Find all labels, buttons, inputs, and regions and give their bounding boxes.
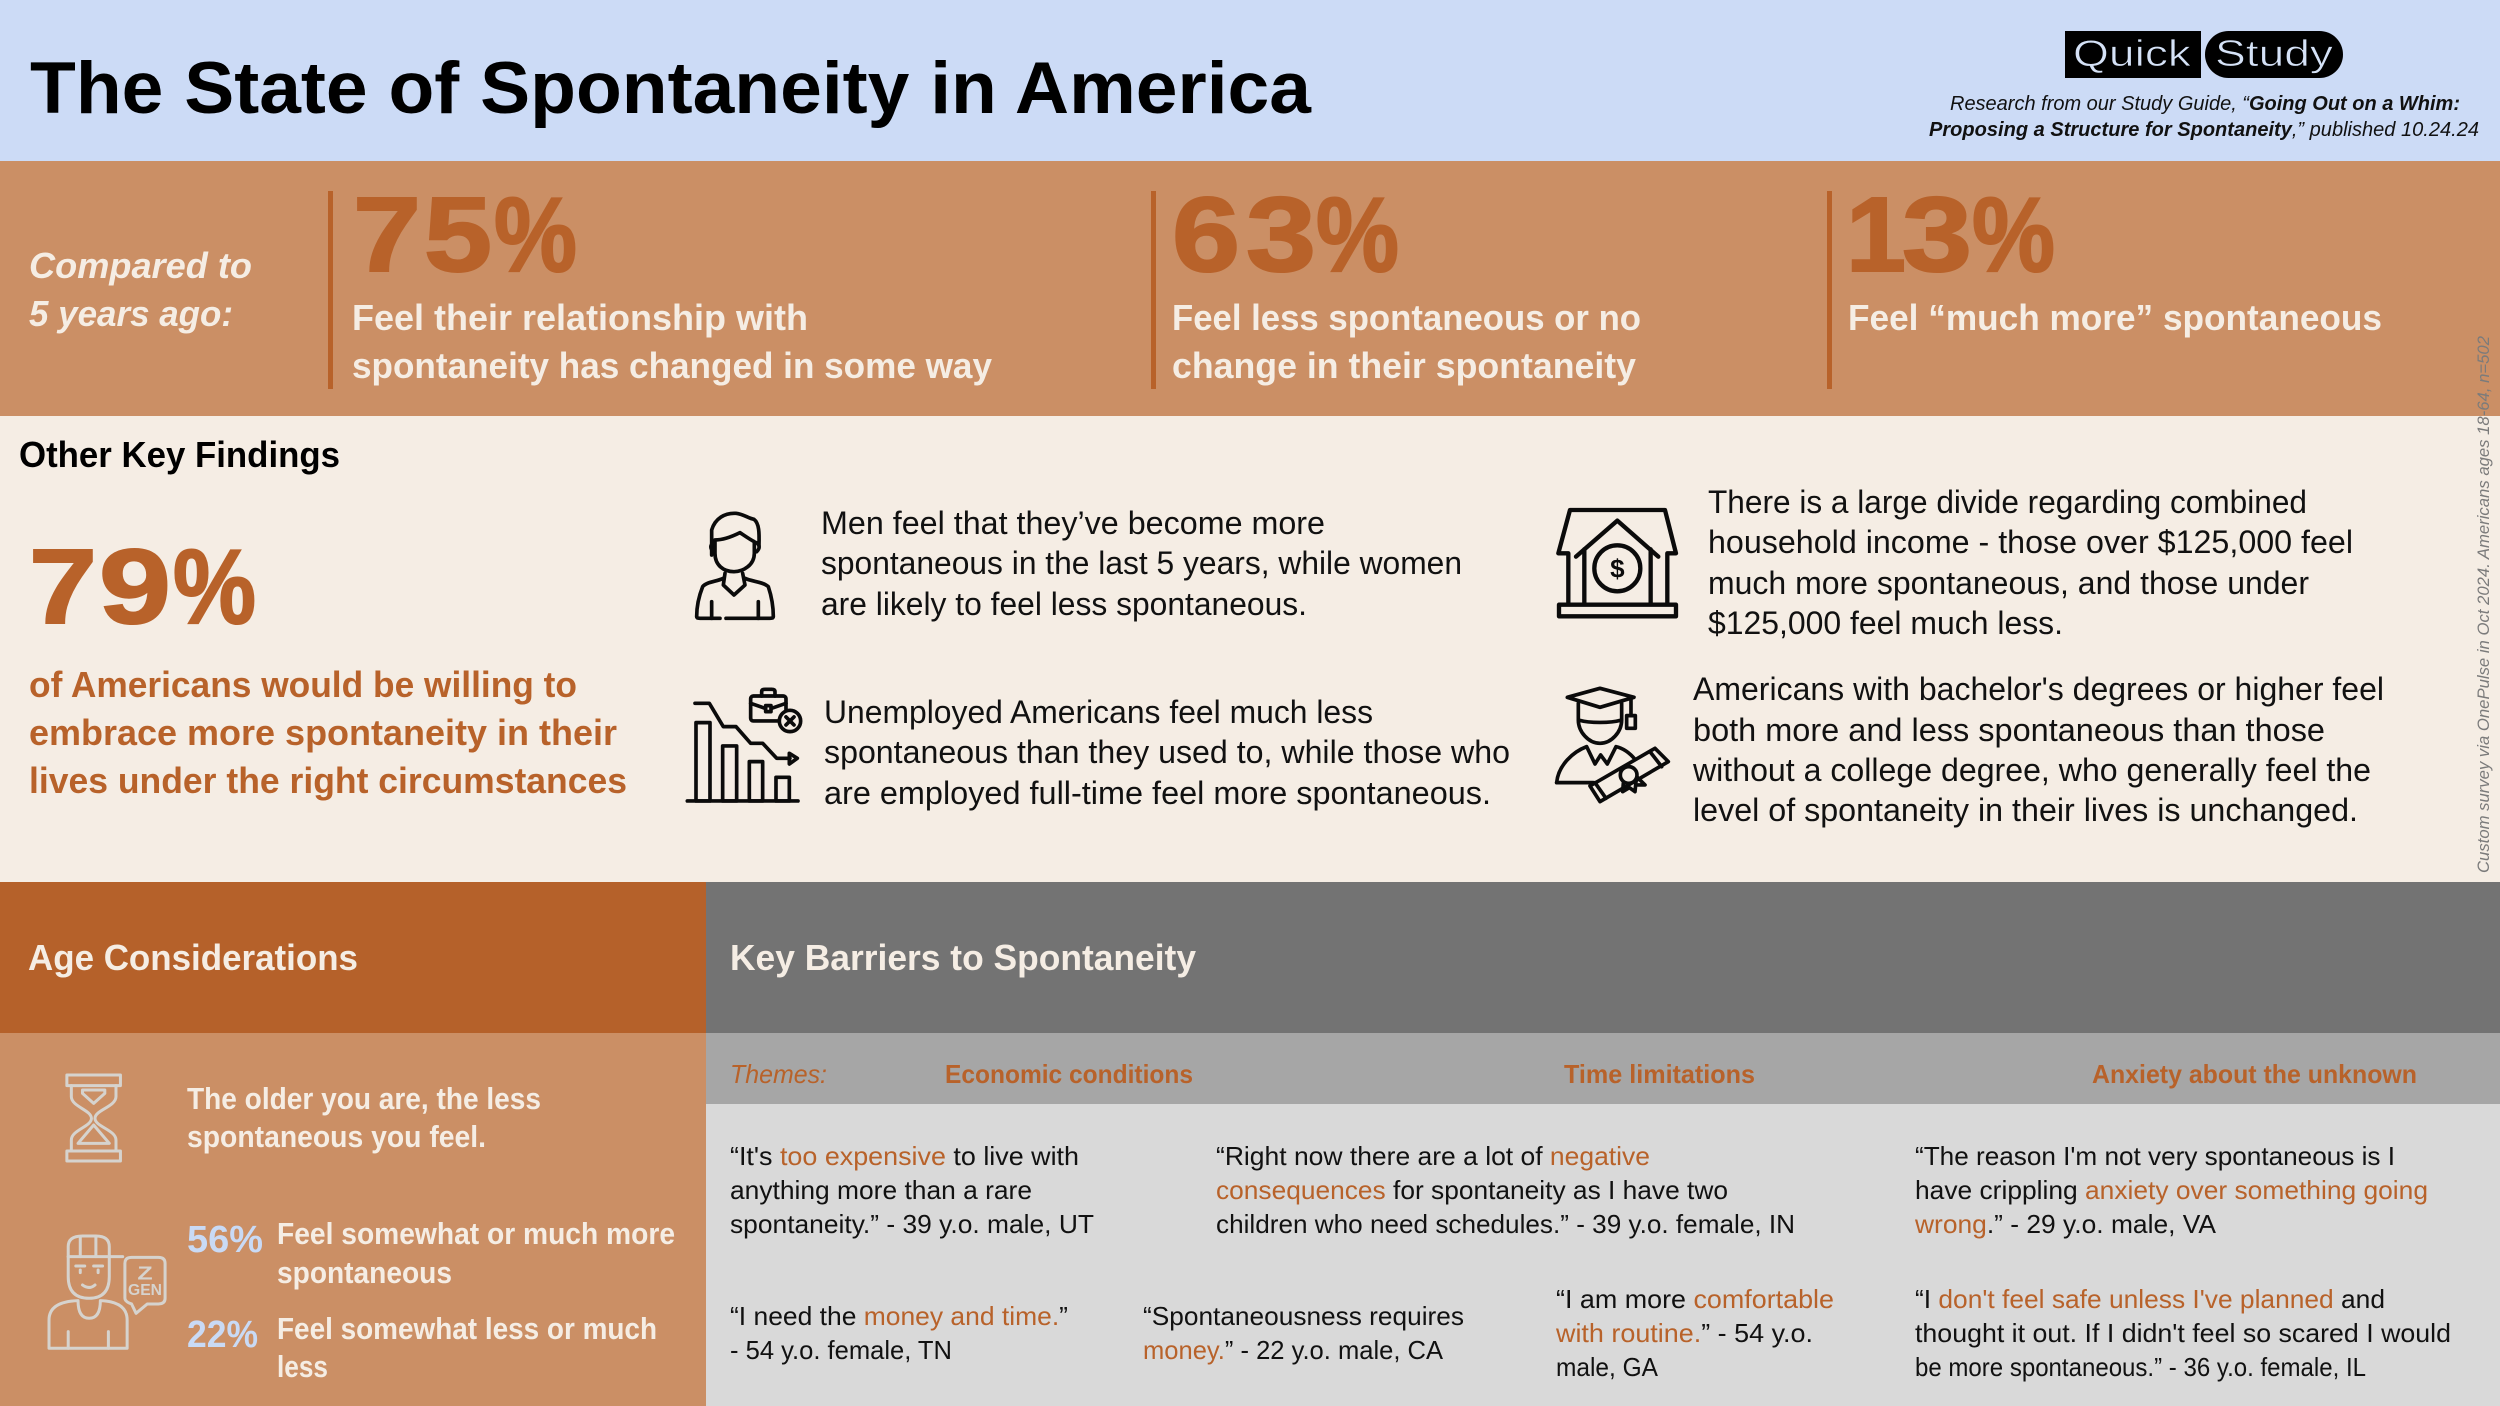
stat: 63%: change in their spontaneity — [1172, 345, 1636, 386]
text: older you are: The older you are, the less — [187, 1081, 541, 1116]
source note: Proposing a Structure for Spontaneity,” published 10.24.24 — [1929, 119, 2479, 141]
stat: 13%: % — [1972, 176, 2055, 294]
stat: 56% more spontaneous — [187, 1216, 675, 1290]
label: compared to — [29, 245, 252, 334]
stat: 75% — [352, 176, 992, 386]
text: older you are — [187, 1081, 541, 1154]
label: compared to: 5 years ago: — [29, 293, 233, 334]
stat: 63%: Feel less spontaneous or no — [1172, 297, 1641, 338]
quote: comfortable with routine: with routine.” - 54 y.o. — [1555, 1318, 1813, 1348]
themes row: Anxiety about the unknown — [2092, 1059, 2417, 1089]
stat: 63%: 6 — [1172, 176, 1240, 294]
stat: 79%: 7 — [29, 528, 97, 646]
stat: 22% less spontaneous — [187, 1311, 657, 1384]
label: compared to: Compared to — [29, 245, 252, 286]
quote: don't feel safe: thought it out. If I didn't feel so scared I would — [1915, 1318, 2451, 1348]
finding: employment — [824, 694, 1510, 811]
finding: household income — [1708, 484, 2353, 641]
panel: compared to 5 years ago — [0, 161, 2500, 416]
quote: don't feel safe — [1915, 1284, 2451, 1382]
finding: education: level of spontaneity in their lives is unchanged. — [1693, 792, 2358, 828]
stat: 79%: lives under the right circumstances — [29, 760, 627, 801]
quote: money and time: - 54 y.o. female, TN — [730, 1335, 952, 1365]
quote: anxiety: “The reason I'm not very spontaneous is I — [1915, 1141, 2395, 1171]
stat: 75%: spontaneity has changed in some way — [352, 345, 992, 386]
quote: money and time: “I need the money and time.” — [730, 1301, 1068, 1331]
quote: too expensive: anything more than a rare — [730, 1175, 1032, 1205]
panel: age considerations — [0, 882, 706, 1406]
themes row — [730, 1059, 2417, 1089]
finding: men and women: spontaneous in the last 5 years, while women — [821, 545, 1462, 581]
stat: 56% more spontaneous: Feel somewhat or much more — [277, 1216, 675, 1251]
quote: anxiety — [1914, 1141, 2428, 1239]
quote: don't feel safe: be more spontaneous.” - 36 y.o. female, IL — [1915, 1352, 2366, 1382]
logo: Quick Study: Study — [2215, 33, 2334, 74]
heading: other key findings: Other Key Findings — [19, 434, 340, 475]
stat: 22% less spontaneous: 22% — [187, 1314, 258, 1356]
themes row: Time limitations — [1564, 1059, 1755, 1089]
finding: education: both more and less spontaneous than those — [1693, 712, 2325, 748]
quote: too expensive: spontaneity.” - 39 y.o. male, UT — [730, 1209, 1094, 1239]
quote: anxiety: have crippling anxiety over something going — [1915, 1175, 2428, 1205]
stat: 75%: 7 — [353, 176, 421, 294]
stat: 13%: 1 — [1846, 176, 1906, 294]
icon: graduate with diploma — [1557, 688, 1668, 802]
finding: household income: There is a large divide regarding combined — [1708, 484, 2307, 520]
stat: 22% less spontaneous: Feel somewhat less or much — [277, 1311, 657, 1346]
finding: education: without a college degree, who generally feel the — [1692, 752, 2371, 788]
quote: anxiety: wrong.” - 29 y.o. male, VA — [1914, 1209, 2217, 1239]
finding: men and women: Men feel that they’ve become more — [821, 505, 1325, 541]
heading: age considerations: Age Considerations — [28, 937, 358, 978]
stat: 79%: embrace more spontaneity in their — [29, 712, 617, 753]
text: older you are: spontaneous you feel. — [187, 1119, 486, 1154]
logo: Quick Study — [2065, 31, 2343, 78]
stat: 79% — [29, 528, 627, 801]
icon: man — [697, 513, 773, 618]
themes row: Themes: — [730, 1059, 827, 1089]
finding: employment: Unemployed Americans feel much less — [824, 694, 1373, 730]
heading: key barriers: Key Barriers to Spontaneity — [730, 937, 1196, 978]
icon: gen z person — [49, 1236, 165, 1348]
stat: 56% more spontaneous: 56% — [187, 1219, 263, 1261]
stat: 79%: of Americans would be willing to — [29, 664, 577, 705]
icon: house with dollar sign — [1558, 510, 1676, 616]
stat: 56% more spontaneous: spontaneous — [277, 1255, 452, 1290]
icon: gen z person: Z — [137, 1262, 153, 1284]
stat: 13%: 3 — [1902, 176, 1972, 294]
finding: education: Americans with bachelor's degrees or higher feel — [1693, 671, 2384, 707]
icon: house with dollar sign: $ — [1610, 553, 1625, 583]
finding: household income: much more spontaneous, and those under — [1708, 565, 2309, 601]
quote: too expensive — [730, 1141, 1094, 1239]
finding: household income: $125,000 feel much less. — [1708, 605, 2063, 641]
themes row: Economic conditions — [945, 1059, 1193, 1089]
quote: too expensive: “It's too expensive to live with — [730, 1141, 1079, 1171]
icon: hourglass — [67, 1075, 120, 1161]
finding: men and women: are likely to feel less spontaneous. — [821, 586, 1307, 622]
stat: 63%: 3 — [1246, 176, 1316, 294]
quote: don't feel safe: “I don't feel safe unless I've planned and — [1915, 1284, 2385, 1314]
panel: header — [0, 0, 2500, 161]
quote: comfortable with routine — [1555, 1284, 1834, 1382]
stat: 79%: % — [173, 528, 256, 646]
stat: 63% — [1172, 176, 1641, 386]
finding: men and women — [821, 505, 1462, 622]
logo: Quick Study: Quick — [2073, 33, 2192, 74]
quote: negative consequences: children who need schedules.” - 39 y.o. female, IN — [1216, 1209, 1795, 1239]
stat: 22% less spontaneous: less — [277, 1349, 328, 1384]
stat: 75%: % — [494, 176, 577, 294]
stat: 79%: 9 — [99, 528, 171, 646]
icon: gen z person: GEN — [128, 1281, 162, 1298]
finding: household income: household income - those over $125,000 feel — [1708, 524, 2353, 560]
source note: Research from our Study Guide, “Going Out on a Whim: — [1950, 93, 2460, 115]
quote: negative consequences: consequences for spontaneity as I have two — [1216, 1175, 1728, 1205]
title: The State of Spontaneity in America — [30, 48, 1312, 129]
quote: negative consequences — [1216, 1141, 1795, 1239]
stat: 75%: Feel their relationship with — [352, 297, 808, 338]
panel: key barriers to spontaneity — [706, 882, 2500, 1406]
quote: negative consequences: “Right now there are a lot of negative — [1216, 1141, 1650, 1171]
quote: comfortable with routine: “I am more comfortable — [1556, 1284, 1834, 1314]
finding: employment: are employed full-time feel more spontaneous. — [824, 775, 1491, 811]
stat: 75%: 5 — [424, 176, 492, 294]
quote: comfortable with routine: male, GA — [1556, 1352, 1659, 1382]
quote: spontaneousness requires money — [1143, 1301, 1464, 1365]
icon: declining chart with briefcase — [687, 689, 801, 801]
source credit (vertical): Custom survey via OnePulse in Oct 2024. Americans ages 18-64, n=502 — [2475, 336, 2493, 873]
source note — [1929, 93, 2479, 141]
stat: 63%: % — [1316, 176, 1399, 294]
stat: 13%: Feel “much more” spontaneous — [1848, 297, 2382, 338]
finding: employment: spontaneous than they used to, while those who — [824, 734, 1510, 770]
quote: money and time — [730, 1301, 1068, 1365]
panel: other key findings — [0, 416, 2500, 882]
quote: spontaneousness requires money: “Spontaneousness requires — [1143, 1301, 1464, 1331]
stat: 13% — [1846, 176, 2382, 338]
finding: education — [1692, 671, 2384, 828]
quote: spontaneousness requires money: money.” - 22 y.o. male, CA — [1143, 1335, 1444, 1365]
